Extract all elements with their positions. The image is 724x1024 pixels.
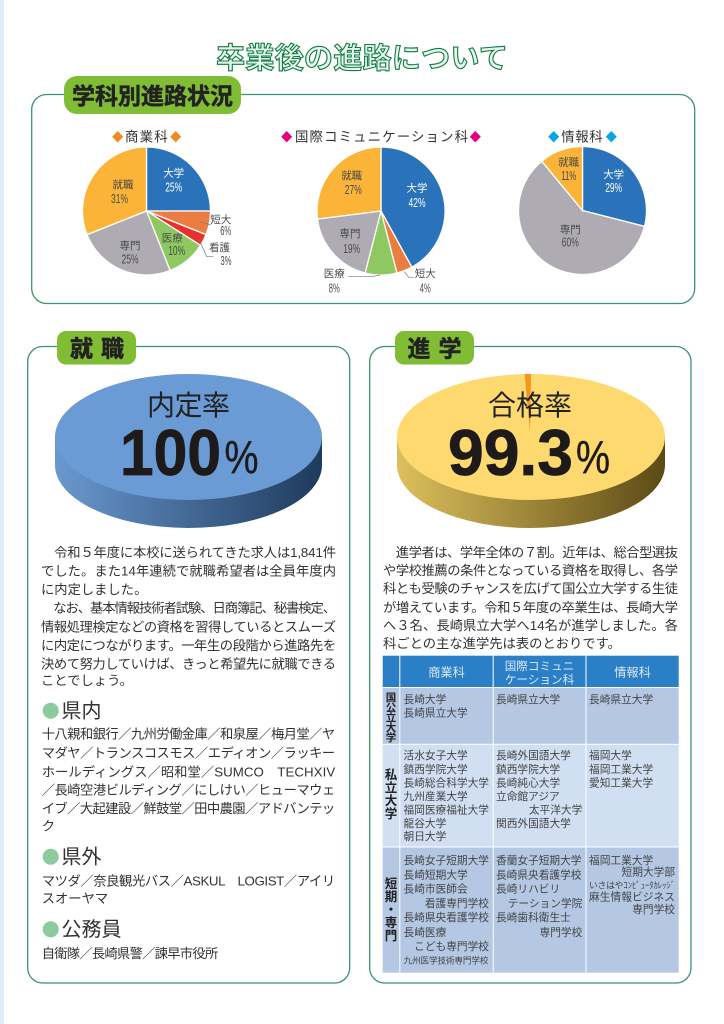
list: employers within prefecture: ク [42,819,55,834]
pie chart: commerce: 10% [168,243,185,258]
text block: employment description: 決めて努力していけば、きっと希望先に就職できる [41,656,336,672]
table row: junior colleges and vocational schools: 短期大学部 [622,866,675,879]
pie chart: commerce: 看護 [209,241,230,254]
table header: 国際コミュニ [505,660,574,673]
list: employers within prefecture: 県内 [62,700,102,722]
table row: private universities: 関西外国語大学 [496,817,571,830]
pie chart: commerce: 就職 [112,178,134,191]
table row: junior colleges and vocational schools: 看護専門学校 [425,897,489,910]
table row: private universities: 九州産業大学 [404,790,468,803]
table row: junior colleges and vocational schools: 専門学校 [540,926,583,939]
panel: employment [28,331,350,983]
table row: national and public universities: 長崎県立大学 [496,693,560,706]
list: public servants: 公務員 [62,918,122,941]
text block: employment description: でした。また14年連続で就職希望者は全員年度内 [41,562,336,578]
table row: private universities: 朝日大学 [404,830,447,843]
pie chart: international communication: 大学 [406,182,428,194]
text block: employment description: 情報処理検定などの資格を習得しているとスムーズ [41,618,336,634]
table row: junior colleges and vocational schools: 九州医学技術専門学校 [404,955,489,966]
list: public servants [42,918,218,961]
table header: 情報科 [614,666,651,680]
heading badge: department career status: 学科別進路状況 [72,83,233,109]
disk chart: pass rate 99.3%: 99.3 [448,416,573,489]
table row: private universities: 長崎純心大学 [496,776,560,789]
list: employers outside prefecture: スオーヤマ [42,891,108,906]
list: employers outside prefecture [42,846,335,906]
pie chart: information: 情報科 [561,130,603,144]
text block: employment description: に内定につながります。一年生の段階から進路先を [41,638,336,653]
heading badge: further education [395,331,474,364]
table row: private universities: 立命館アジア [496,790,560,803]
pie chart: international communication: 8% [329,280,340,296]
text block: employment description: に内定しました。 [41,582,147,597]
pie chart: international communication [281,130,481,296]
pie chart: information: 11% [561,168,576,183]
pie chart: international communication: 医療 [324,267,345,280]
table row: private universities: 愛知工業大学 [589,776,653,789]
disk chart: job offer rate 100%: 100 [120,416,221,489]
table row: private universities: 鎮西学院大学 [496,763,560,776]
table row: private universities: 立 [385,780,397,795]
table row: junior colleges and vocational schools: 長崎市医師会 [404,883,468,896]
table row: private universities [383,745,679,846]
table row: junior colleges and vocational schools: 門 [385,929,397,943]
table header [383,656,679,687]
table row: national and public universities: 長崎県立大学 [589,693,653,706]
pie chart: commerce: 25% [122,252,139,266]
table row: junior colleges and vocational schools [383,848,679,973]
disk chart: pass rate 99.3% [397,374,665,528]
table row: junior colleges and vocational schools: こども専門学校 [414,940,489,953]
pie chart: commerce: 31% [111,191,128,206]
disk chart: job offer rate 100% [55,374,322,528]
text block: employment description: ことでしょう。 [41,673,133,688]
table row: junior colleges and vocational schools: 短 [385,876,398,891]
pie chart: international communication: 19% [343,241,360,256]
list: employers within prefecture: イブ／大起建設／鮮鼓堂／田中農園／アドバンテッ [42,800,335,816]
list: employers within prefecture: 十八親和銀行／九州労働金庫／和泉屋／梅月堂／ヤ [42,726,335,742]
pie chart: commerce: 大学 [163,166,184,180]
table row: junior colleges and vocational schools: 長崎医療 [404,926,447,939]
heading badge: further education: 進学 [408,336,462,362]
table row: junior colleges and vocational schools: いさはやｺﾝﾋﾟｭｰﾀｶﾚｯｼﾞ [589,881,675,891]
pie chart: international communication: 短大 [415,267,436,280]
list: employers outside prefecture: 県外 [62,846,102,868]
pie chart: commerce: 専門 [120,240,140,252]
table row: private universities: 福岡医療福祉大学 [404,803,489,816]
text block: further education description: 科ごとの主な進学先は表のとおりです。 [383,636,621,651]
text block: further education description: 進学者は、学年全体の７割。近年は、総合型選抜 [383,545,678,560]
text block: further education description: へ３名、長崎県立大学へ14名が進学しました。各 [383,618,678,633]
table row: junior colleges and vocational schools: 長崎短期大学 [404,869,468,882]
table row: national and public universities: 大 [386,721,397,734]
table row: junior colleges and vocational schools: 専門学校 [632,903,675,916]
list: employers within prefecture: ホールディングス／昭和堂／SUMCO TECHXIV [42,763,335,779]
list: employers within prefecture: ／長崎空港ビルディング／にしけい／ヒューマウェ [42,782,335,798]
table row: private universities: 太平洋大学 [529,803,583,816]
table row: private universities: 長崎外国語大学 [496,749,571,762]
list: employers outside prefecture: マツダ／奈良観光バス／ASKUL LOGIST／アイリ [42,873,335,888]
disk chart: job offer rate 100%: % [224,431,258,483]
table row: junior colleges and vocational schools: 長崎リハビリ [496,883,560,896]
table row: junior colleges and vocational schools: 長崎県央看護学校 [404,911,489,924]
pie chart: information: 大学 [603,168,624,181]
pie chart: international communication: 27% [345,182,362,197]
pie chart: international communication: 国際コミュニケーション科 [295,130,468,144]
disk chart: pass rate 99.3%: % [576,431,610,483]
table row: private universities: 活水女子大学 [404,749,468,762]
table row: junior colleges and vocational schools: 長崎県央看護学校 [496,869,582,882]
table row: junior colleges and vocational schools: 福岡工業大学 [589,854,653,867]
table row: private universities: 福岡大学 [589,749,632,762]
table: destinations by department [383,656,679,973]
table row: junior colleges and vocational schools: ・ [385,903,397,917]
table header: ケーション科 [505,672,575,686]
pie chart: international communication: 専門 [340,228,360,240]
table row: national and public universities: 公 [386,702,397,714]
table row: private universities: 龍谷大学 [404,817,447,830]
pie chart: commerce: 医療 [162,232,183,244]
list: employers within prefecture [42,700,335,834]
title: 卒業後の進路について [216,42,508,75]
pie chart: information [519,130,647,275]
pie chart: information: 60% [562,234,579,250]
text block: employment description: なお、基本情報技術者試験、日商簿記、秘書検定、 [41,600,336,616]
text block: further education description [383,545,678,651]
pie chart: international communication: 就職 [341,169,363,182]
pie chart: commerce: 商業科 [125,130,168,144]
panel: department career status [32,76,695,304]
table row: national and public universities: 長崎県立大学 [404,707,468,720]
table row: national and public universities [383,688,679,744]
pie chart: international communication: 42% [408,195,426,210]
pie chart: commerce: 25% [165,180,182,194]
heading badge: department career status [64,76,241,114]
table row: junior colleges and vocational schools: 長崎歯科衛生士 [496,911,571,924]
table row: junior colleges and vocational schools: 麻生情報ビジネス [589,891,675,904]
table row: private universities: 鎮西学院大学 [404,763,468,776]
text block: further education description: や学校推薦の条件となっている資格を取得し、各学 [383,562,678,578]
disk chart: pass rate 99.3%: 合格率 [488,390,572,421]
heading badge: employment [57,331,136,364]
pie chart: international communication: 4% [420,280,431,296]
pie chart: commerce: 6% [220,223,231,238]
pie chart: commerce [82,130,232,275]
table row: junior colleges and vocational schools: テーション学院 [508,897,583,910]
heading badge: employment: 就職 [70,336,124,362]
list: public servants: 自衛隊／長崎県警／諫早市役所 [42,946,218,961]
disk chart: job offer rate 100%: 内定率 [147,390,230,421]
table row: private universities: 私 [385,767,398,782]
pie chart: commerce: 短大 [210,213,232,226]
table row: junior colleges and vocational schools: 期 [385,890,397,904]
text block: employment description: 令和５年度に本校に送られてきた求人は1,841件 [41,545,336,560]
table row: national and public universities: 国 [386,692,396,704]
panel: further education [370,331,691,983]
pie chart: commerce: 3% [220,253,232,268]
pie chart: information: 29% [605,180,622,195]
table header: 商業科 [428,666,465,680]
table row: national and public universities: 立 [386,711,397,724]
text block: further education description: が増えています。令和５年度の卒業生は、長崎大学 [383,600,678,615]
table row: private universities: 大 [385,793,398,808]
table row: national and public universities: 長崎大学 [404,693,447,706]
table row: private universities: 長崎総合科学大学 [404,776,489,789]
list: employers within prefecture: マダヤ／トランスコスモス／エディオン／ラッキー [42,744,335,760]
table row: junior colleges and vocational schools: 専 [385,915,397,930]
table row: junior colleges and vocational schools: 香蘭女子短期大学 [496,854,582,867]
text block: employment description [41,545,336,688]
pie chart: information: 専門 [560,224,581,236]
text block: further education description: 科とも受験のチャンスを広げて国公立大学する生徒 [383,581,678,596]
table row: private universities: 学 [385,806,397,821]
table row: national and public universities: 学 [386,731,396,744]
table row: junior colleges and vocational schools: 長崎女子短期大学 [404,854,489,867]
pie chart: information: 就職 [558,156,580,168]
table row: private universities: 福岡工業大学 [589,763,653,776]
